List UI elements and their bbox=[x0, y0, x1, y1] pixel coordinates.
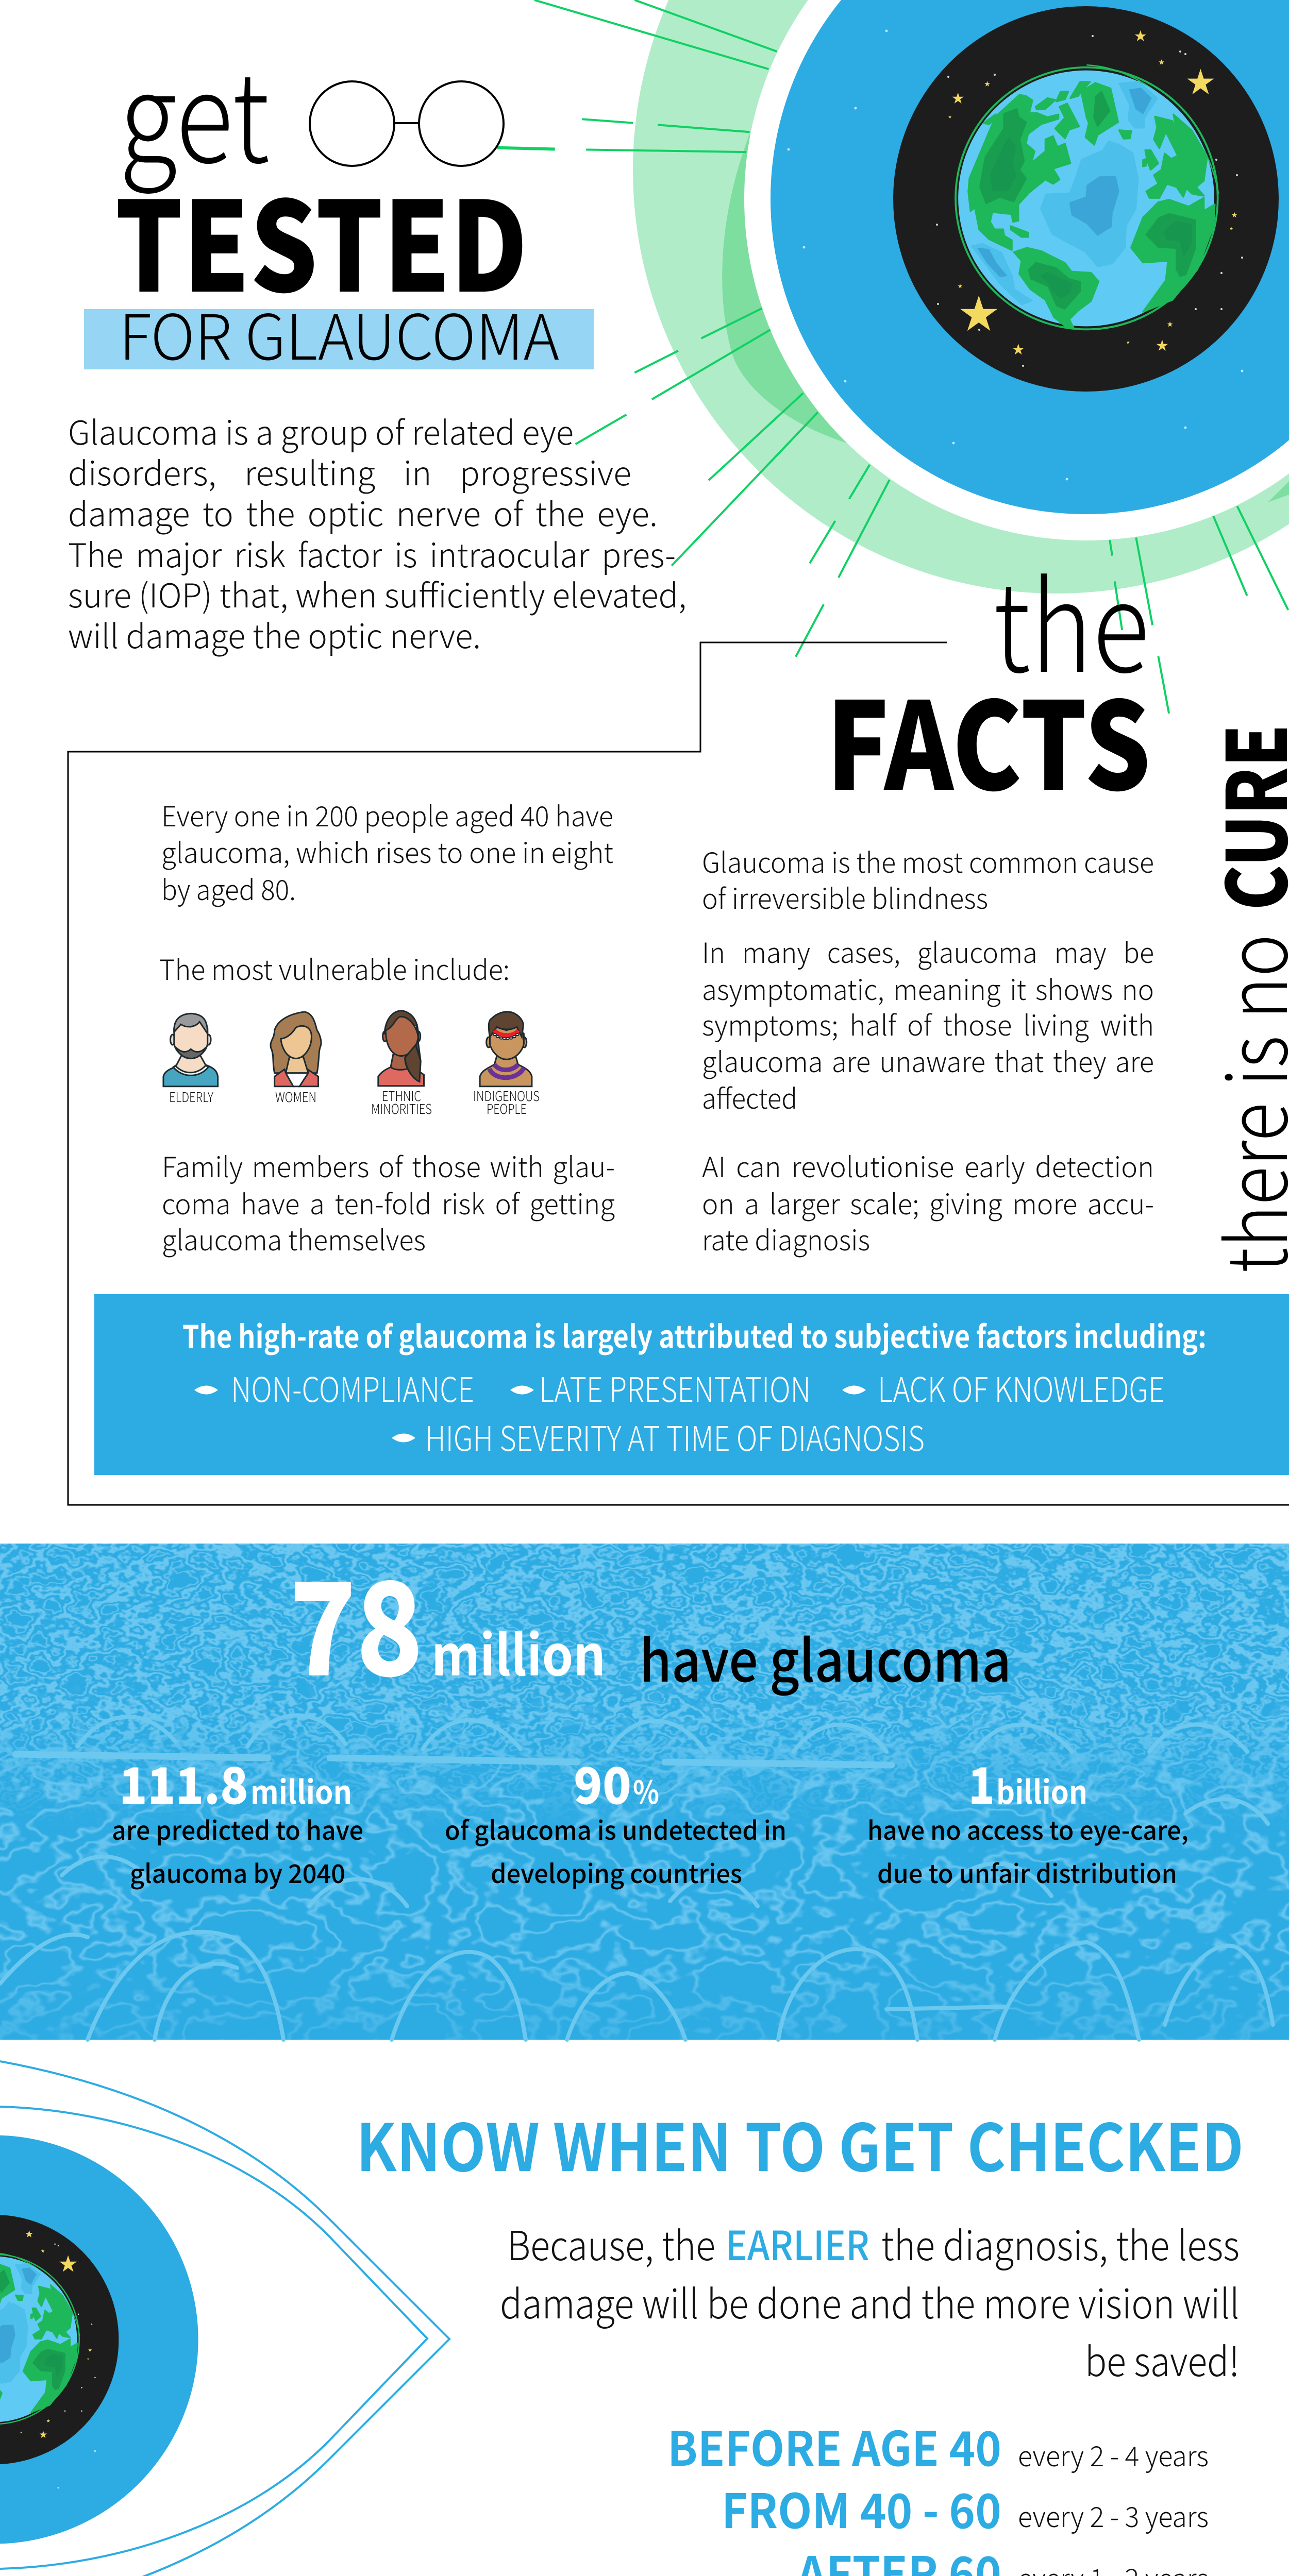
check schedule: FROM 40 - 60 bbox=[722, 2473, 1001, 2542]
panel: subjective factors bbox=[94, 1294, 1289, 1475]
check schedule: every 2 - 3 years bbox=[1018, 2495, 1209, 2535]
intro paragraph: damage to the optic nerve of the eye. bbox=[68, 488, 658, 536]
stat: 111.8 million: glaucoma by 2040 bbox=[130, 1854, 345, 1891]
title: FOR GLAUCOMA bbox=[119, 287, 559, 378]
stat: 1 billion: have no access to eye-care, bbox=[867, 1810, 1188, 1848]
icon labels: MINORITIES bbox=[371, 1099, 432, 1118]
facts left column: Every one in 200 people aged 40 have bbox=[161, 794, 613, 835]
facts right column: In many cases, glaucoma may be bbox=[702, 930, 1154, 971]
panel: subjective factors: LACK OF KNOWLEDGE bbox=[878, 1363, 1165, 1412]
title bbox=[84, 20, 594, 378]
title: get bbox=[119, 20, 270, 198]
heading: the facts bbox=[826, 529, 1151, 825]
facts right column: affected bbox=[702, 1076, 797, 1117]
intro paragraph: sure (IOP) that, when sufficiently elevated, bbox=[68, 570, 687, 617]
check schedule bbox=[667, 2411, 1209, 2576]
facts left column bbox=[159, 794, 615, 1259]
icon labels: PEOPLE bbox=[487, 1099, 527, 1118]
panel: subjective factors: NON-COMPLIANCE bbox=[231, 1363, 474, 1412]
facts left column: The most vulnerable include: bbox=[159, 947, 510, 988]
stat: 90 percent: developing countries bbox=[491, 1854, 742, 1891]
check schedule: BEFORE AGE 40 bbox=[667, 2411, 1001, 2480]
stat: 111.8 million bbox=[112, 1745, 363, 1891]
facts left column: glaucoma, which rises to one in eight bbox=[161, 831, 613, 871]
facts left column: coma have a ten-fold risk of getting bbox=[162, 1182, 615, 1223]
facts right column: AI can revolutionise early detection bbox=[702, 1145, 1154, 1185]
icon labels bbox=[169, 1086, 540, 1118]
icon: woman bbox=[271, 1012, 321, 1087]
icon: glasses bbox=[310, 81, 504, 166]
facts right column: of irreversible blindness bbox=[702, 876, 988, 917]
intro paragraph: will damage the optic nerve. bbox=[68, 611, 481, 658]
text: earlier diagnosis: EARLIER bbox=[726, 2214, 869, 2272]
stat: 90 percent: of glaucoma is undetected in bbox=[445, 1810, 786, 1848]
facts right column: symptoms; half of those living with bbox=[702, 1003, 1154, 1044]
stat: 90 percent: 90 bbox=[574, 1745, 631, 1818]
facts left column: by aged 80. bbox=[161, 868, 296, 908]
icon: ethnic minority bbox=[378, 1011, 424, 1086]
heading: the facts: the bbox=[993, 529, 1149, 708]
facts left column: Family members of those with glau- bbox=[162, 1145, 615, 1185]
intro paragraph: Glaucoma is a group of related eye bbox=[68, 407, 574, 454]
icon labels: INDIGENOUS bbox=[473, 1086, 540, 1105]
hero globe graphic bbox=[633, 0, 1289, 594]
intro paragraph bbox=[68, 407, 687, 658]
text: earlier diagnosis: be saved! bbox=[1085, 2330, 1240, 2388]
intro paragraph: The major risk factor is intraocular pres- bbox=[68, 530, 676, 577]
icon: indigenous person bbox=[480, 1012, 532, 1087]
green rays around globe bbox=[497, 0, 1288, 714]
stat: 1 billion bbox=[867, 1745, 1188, 1891]
text: earlier diagnosis: Because, the bbox=[507, 2214, 715, 2272]
facts right column: Glaucoma is the most common cause bbox=[702, 840, 1154, 881]
stat: 111.8 million: 111.8 bbox=[119, 1745, 248, 1818]
icon: elderly bbox=[163, 1013, 218, 1087]
vulnerable people icons bbox=[163, 1011, 532, 1087]
stat: 90 percent: % bbox=[633, 1767, 659, 1813]
heading: the facts: FACTS bbox=[826, 649, 1151, 825]
facts right column bbox=[702, 840, 1154, 1259]
eye graphic with globe bbox=[0, 2061, 449, 2576]
facts left column: glaucoma themselves bbox=[162, 1218, 426, 1259]
stat: 78 million have glaucoma: 78 bbox=[289, 1526, 423, 1713]
check schedule: every 2 - 4 years bbox=[1018, 2434, 1209, 2475]
panel: subjective factors: HIGH SEVERITY AT TIME OF DIAGNOSIS bbox=[425, 1412, 925, 1461]
icon labels: ETHNIC bbox=[382, 1086, 421, 1105]
text: earlier diagnosis: the diagnosis, the less bbox=[881, 2214, 1240, 2272]
facts right column: glaucoma are unaware that they are bbox=[702, 1040, 1154, 1080]
stat: 111.8 million: are predicted to have bbox=[112, 1810, 363, 1848]
stat: 1 billion: due to unfair distribution bbox=[877, 1854, 1177, 1891]
facts right column: asymptomatic, meaning it shows no bbox=[702, 968, 1154, 1008]
stat: 1 billion: 1 bbox=[968, 1745, 995, 1818]
facts right column: on a larger scale; giving more accu- bbox=[702, 1182, 1154, 1223]
stat: 1 billion: billion bbox=[996, 1767, 1087, 1813]
facts panel frame bbox=[68, 642, 1289, 1505]
text: earlier diagnosis bbox=[500, 2214, 1240, 2388]
stat: 111.8 million: million bbox=[250, 1767, 352, 1813]
title: TESTED bbox=[115, 148, 528, 328]
facts right column: rate diagnosis bbox=[702, 1218, 870, 1259]
stat: 78 million have glaucoma: million bbox=[431, 1612, 606, 1692]
intro paragraph: disorders, resulting in progressive bbox=[68, 448, 631, 495]
panel: statistics background with crowd bbox=[0, 1544, 1289, 2040]
panel: subjective factors: LATE PRESENTATION bbox=[539, 1363, 811, 1412]
stat: 78 million have glaucoma bbox=[289, 1526, 1011, 1713]
stat: 90 percent bbox=[445, 1745, 786, 1891]
stat: 78 million have glaucoma: have glaucoma bbox=[640, 1615, 1011, 1699]
icon labels: WOMEN bbox=[275, 1087, 316, 1106]
icon labels: ELDERLY bbox=[169, 1087, 213, 1106]
